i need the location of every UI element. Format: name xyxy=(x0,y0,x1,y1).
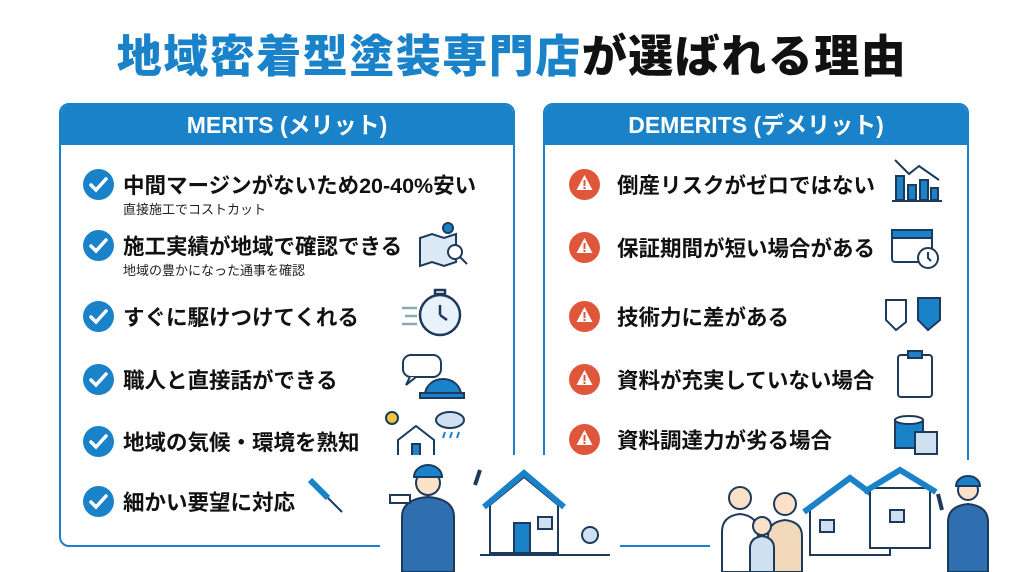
icon: falling chart xyxy=(892,160,942,201)
demerit 3 xyxy=(569,301,789,332)
demerit 2: 保証期間が短い場合がある xyxy=(617,237,875,261)
merit 5: 地域の気候・環境を熟知 xyxy=(123,431,360,455)
panel: merits xyxy=(59,103,515,547)
demerit 1: 倒産リスクがゼロではない xyxy=(617,174,875,198)
panel: demerits xyxy=(543,103,969,547)
merit 6: 細かい要望に対応 xyxy=(123,491,295,515)
panel: merits: 直接施工でコストカット xyxy=(123,202,266,217)
illustration: painter and house xyxy=(380,455,620,572)
merit 2 xyxy=(83,230,402,278)
demerit 5: 資料調達力が劣る場合 xyxy=(617,429,832,453)
icon: paint cans xyxy=(895,416,937,454)
merit 5 xyxy=(83,426,360,457)
icon: speech + helmet xyxy=(403,355,464,398)
demerit 4: 資料が充実していない場合 xyxy=(617,369,874,393)
demerits header: DEMERITS (デメリット) xyxy=(628,112,884,138)
icon: weather house xyxy=(386,412,464,456)
icon: brush xyxy=(310,480,342,512)
merit 2: 施工実績が地域で確認できる xyxy=(123,235,402,259)
merit 4: 職人と直接話ができる xyxy=(123,369,338,393)
merit 3: すぐに駆けつけてくれる xyxy=(123,306,359,330)
merit 6 xyxy=(83,486,295,517)
illustration: family, house and worker xyxy=(710,460,989,572)
demerit 4 xyxy=(569,364,874,395)
merits header: MERITS (メリット) xyxy=(187,112,387,138)
merit 4 xyxy=(83,364,338,395)
demerit 1 xyxy=(569,169,875,200)
icon: gloves xyxy=(886,298,940,330)
title: 地域密着型塗装専門店が選ばれる理由 xyxy=(117,31,907,82)
merit 1: 中間マージンがないため20-40%安い xyxy=(123,174,476,198)
demerit 5 xyxy=(569,424,832,455)
merit 1 xyxy=(83,169,476,217)
icon: stopwatch xyxy=(402,290,460,335)
icon: map xyxy=(420,223,467,266)
demerit 3: 技術力に差がある xyxy=(617,306,789,330)
merits header xyxy=(61,105,513,145)
panel: merits: 地域の豊かになった通事を確認 xyxy=(123,263,305,278)
merit 3 xyxy=(83,301,359,332)
demerits header xyxy=(545,105,967,145)
icon: clipboard xyxy=(898,351,932,397)
demerit 2 xyxy=(569,232,875,263)
icon: calendar clock xyxy=(892,230,938,268)
